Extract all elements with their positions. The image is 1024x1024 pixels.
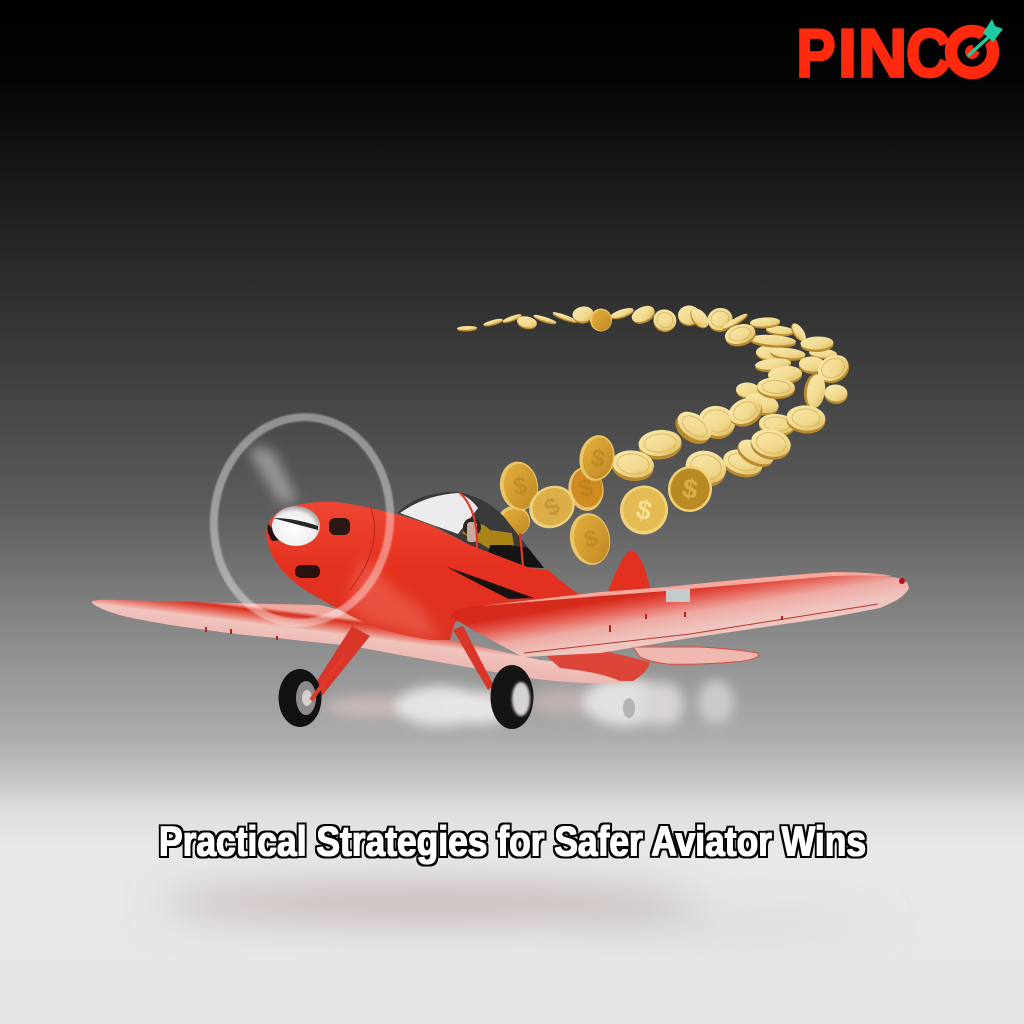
wing leading edge highlight bbox=[480, 572, 893, 606]
fuselage highlight bbox=[350, 560, 440, 640]
logo: PINCO: P bbox=[796, 16, 836, 92]
coin: behind canopy bbox=[498, 506, 530, 536]
coin trail bbox=[457, 303, 854, 568]
wing panel bbox=[666, 589, 690, 602]
propeller blur bbox=[248, 447, 298, 503]
left landing gear bbox=[278, 626, 370, 727]
fuselage bbox=[266, 502, 580, 640]
ground shadow bbox=[160, 885, 880, 935]
aileron line bbox=[524, 604, 878, 653]
tail wheel bbox=[623, 698, 635, 718]
coin trail: $ bbox=[512, 472, 529, 501]
coin trail: $ bbox=[582, 525, 601, 554]
coin trail: $ bbox=[633, 494, 655, 526]
spinner bbox=[272, 506, 320, 546]
coin trail: $ bbox=[589, 444, 607, 473]
logo: PINCO bbox=[796, 14, 1003, 92]
pilot bbox=[463, 518, 481, 542]
right landing gear bbox=[453, 626, 534, 729]
rear fuselage bbox=[540, 650, 650, 681]
smoke cloud bbox=[325, 678, 734, 726]
black stripe bbox=[447, 567, 534, 599]
wing pins bbox=[610, 612, 782, 632]
icon: arrow in target bbox=[969, 19, 1003, 55]
airplane bbox=[92, 408, 909, 729]
title: Practical Strategies for Safer Aviator Wins bbox=[159, 818, 866, 864]
wing tip light bbox=[899, 578, 905, 584]
propeller ring bbox=[204, 408, 400, 632]
canopy bbox=[397, 492, 544, 568]
coin trail: $ bbox=[540, 492, 565, 522]
logo: PINCO: N bbox=[858, 16, 907, 92]
tail fin bbox=[608, 550, 650, 592]
logo: PINCO: C bbox=[906, 14, 950, 91]
coin trail: $ bbox=[680, 473, 700, 505]
air intakes bbox=[329, 518, 350, 535]
tailplane bbox=[633, 647, 758, 664]
wing pins bbox=[206, 627, 277, 640]
left wing bbox=[92, 600, 640, 683]
cowl seam bbox=[350, 505, 374, 590]
logo: PINCO: I bbox=[838, 16, 857, 92]
right wing bbox=[450, 573, 909, 657]
coin trail: $ bbox=[577, 474, 595, 503]
logo target ring bbox=[951, 31, 993, 73]
